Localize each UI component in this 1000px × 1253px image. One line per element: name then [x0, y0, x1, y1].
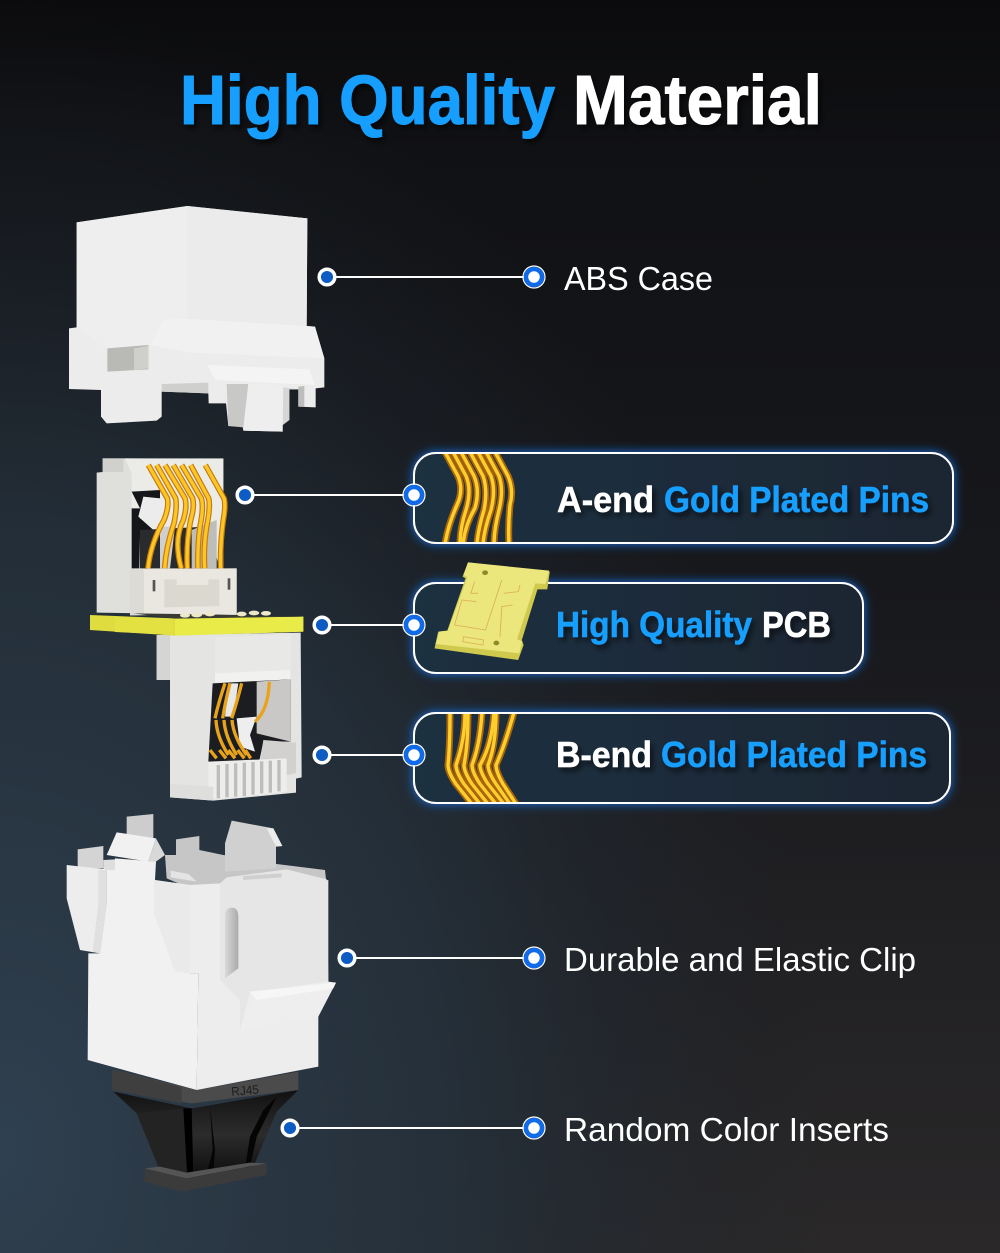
gold pins: [210, 682, 269, 758]
gold pins: [148, 465, 225, 568]
yellow PCB part: [90, 611, 303, 636]
label: Random Color Inserts: Random Color Inserts: [564, 1111, 889, 1148]
label: A-end: [557, 479, 929, 520]
A-end connector part: [97, 458, 237, 615]
label: A-end: Gold Plated Pins: [664, 479, 929, 520]
label: B-end: [556, 734, 927, 775]
B-end connector part: [157, 633, 302, 801]
panel: high quality PCB: [414, 562, 863, 673]
icon: PCB board: [435, 562, 550, 660]
label: ABS Case: ABS Case: [564, 260, 713, 297]
icon: A-end pins: [445, 452, 512, 544]
panel: A-end gold plated pins: [414, 452, 953, 544]
label: B-end: B-end: [556, 734, 652, 775]
title: [180, 61, 822, 139]
label: Durable and Elastic Clip: Durable and Elastic Clip: [564, 941, 916, 978]
right markers: [403, 266, 545, 1139]
ABS case part: [69, 206, 324, 432]
label: PCB: High Quality: [556, 604, 752, 645]
left markers: [237, 269, 355, 1136]
title: Material: [573, 61, 822, 139]
panel: B-end gold plated pins: [414, 712, 950, 804]
icon: B-end pins: [448, 712, 516, 804]
black insert: [112, 1069, 298, 1192]
clip part: [67, 814, 336, 1192]
title: High Quality: [180, 61, 555, 139]
label: PCB: PCB: [762, 604, 831, 645]
label: B-end: Gold Plated Pins: [661, 734, 927, 775]
RJ45 mark: RJ45: [231, 1083, 259, 1099]
label: A-end: A-end: [557, 479, 654, 520]
connector lines: [245, 277, 534, 1128]
